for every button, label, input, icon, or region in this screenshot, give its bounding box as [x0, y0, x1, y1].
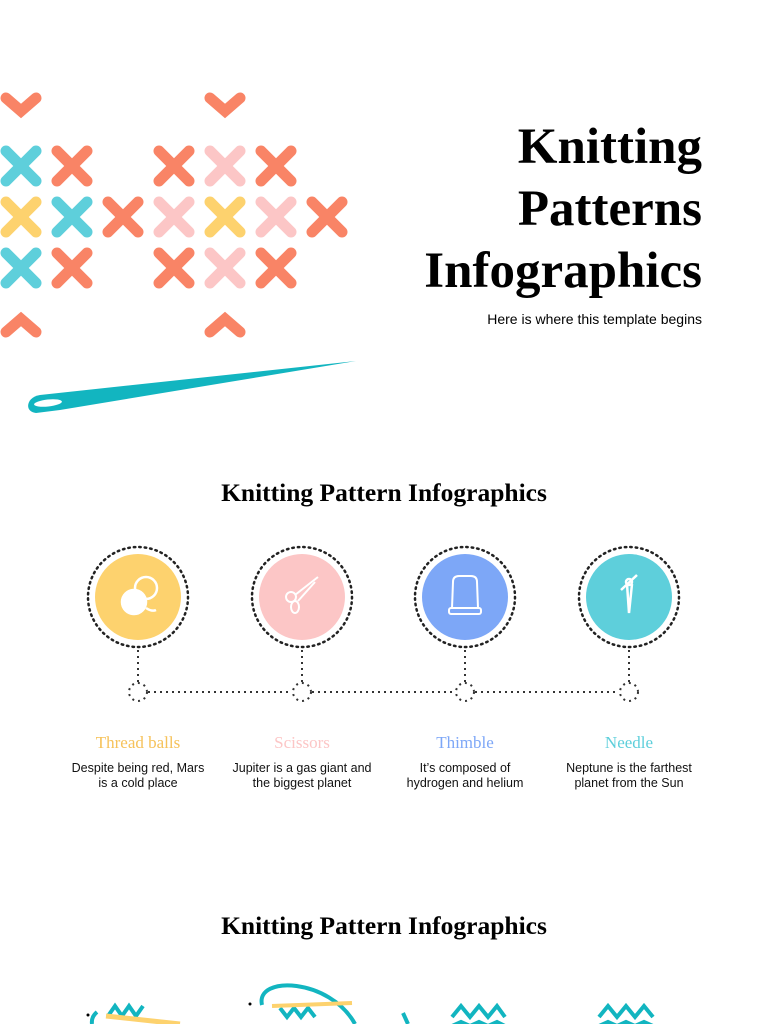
item: thimble: Thimble — [436, 733, 494, 752]
title: Infographics — [424, 243, 702, 299]
item: needle: Neptune is the farthest — [566, 761, 692, 775]
item: needle: planet from the Sun — [574, 776, 684, 790]
icon: needle — [28, 361, 356, 413]
heading: section 1: Knitting Pattern Infographics — [221, 478, 547, 507]
subtitle: Here is where this template begins — [487, 311, 702, 327]
cross-stitch pattern — [6, 98, 342, 332]
bottom stitch icons — [92, 985, 653, 1024]
item: thimble: It’s composed of — [420, 761, 511, 775]
item: thread balls: is a cold place — [98, 776, 178, 790]
icon: thread balls — [122, 577, 157, 614]
item: thread balls: Despite being red, Mars — [72, 761, 204, 775]
item: scissors — [233, 547, 372, 790]
title: Patterns — [518, 181, 702, 237]
title: Knitting — [518, 119, 702, 175]
icon: scissors — [286, 577, 318, 613]
item: thread balls: Thread balls — [96, 733, 180, 752]
item: needle: Needle — [605, 733, 653, 752]
item: scissors: the biggest planet — [253, 776, 352, 790]
heading: section 2: Knitting Pattern Infographics — [221, 911, 547, 940]
item: thimble — [407, 547, 523, 790]
item: scissors: Scissors — [274, 733, 330, 752]
title — [424, 119, 702, 299]
item: needle — [566, 547, 692, 790]
timeline connector — [129, 650, 638, 701]
item: thimble: hydrogen and helium — [407, 776, 523, 790]
icon: needle — [621, 575, 637, 613]
item: scissors: Jupiter is a gas giant and — [233, 761, 372, 775]
icon: thimble — [449, 576, 481, 614]
item: thread balls — [72, 547, 204, 790]
